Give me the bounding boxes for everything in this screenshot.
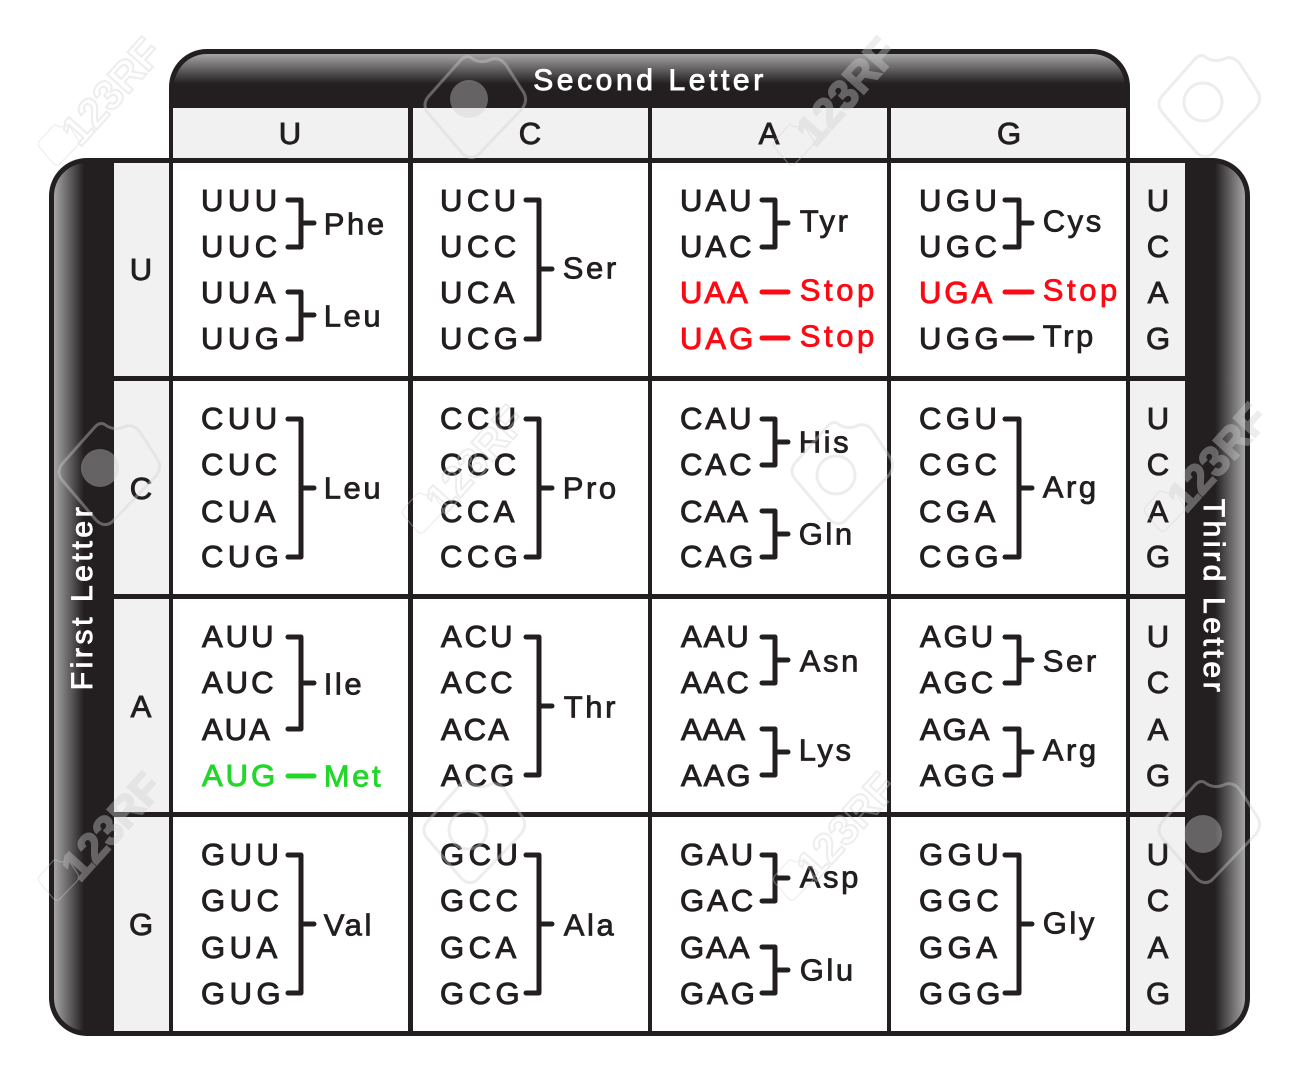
cell: CA: CAG	[680, 539, 756, 574]
cell: GG: GGU	[919, 837, 1003, 872]
cell: GG	[919, 837, 1097, 1011]
first letter row headers: A	[131, 689, 152, 724]
cell: UC: UCU	[440, 183, 521, 218]
cell: CG: Arg	[1043, 470, 1099, 504]
cell: GG: Gly	[1043, 906, 1097, 940]
cell: UU: Leu	[324, 298, 383, 334]
cell: UA: UAC	[680, 229, 754, 264]
cell: GC: Ala	[564, 908, 616, 942]
cell: AU: AUC	[202, 665, 276, 700]
cell: CG: CGG	[919, 539, 1003, 574]
cell: CA: His	[799, 424, 851, 460]
watermark: emblem middle	[792, 422, 893, 524]
third letter column: U	[1147, 183, 1169, 218]
cell: AU: Met	[324, 758, 383, 794]
cell: UU: UUC	[201, 229, 282, 264]
third letter column: G	[1146, 539, 1170, 574]
cell: GG: GGG	[919, 976, 1005, 1011]
cell: AA: AAA	[681, 712, 746, 747]
cell: AA: AAU	[681, 619, 751, 654]
cell: UU: UUU	[201, 183, 282, 218]
cell: UC: Ser	[563, 250, 619, 286]
cell: CA: CAU	[680, 401, 754, 436]
third letter column	[1146, 183, 1170, 1011]
first letter row headers	[129, 252, 153, 942]
watermark: right middle logotype: 123RF	[1158, 395, 1277, 520]
cell: UG: UGC	[919, 229, 1001, 264]
cell: AU: AUU	[202, 619, 276, 654]
third letter column: G	[1146, 321, 1170, 356]
third letter column: A	[1148, 712, 1169, 747]
cell: GG: GGA	[919, 930, 1001, 965]
cell: CU	[201, 401, 383, 574]
cell: CC: CCC	[440, 447, 521, 482]
watermark: emblem left band	[59, 424, 160, 525]
cell: AU: AUA	[202, 712, 272, 747]
cell: CA: CAC	[680, 447, 754, 482]
cell: CC	[440, 401, 619, 574]
cell: UG: Cys	[1043, 204, 1104, 238]
third letter column: A	[1148, 494, 1169, 529]
cell: CG: CGA	[919, 494, 1000, 529]
third letter column: C	[1147, 447, 1169, 482]
cell: GA: GAG	[680, 976, 758, 1011]
cell: UA: Stop	[800, 272, 878, 308]
cell: GC: GCU	[440, 837, 522, 872]
cell: AU	[202, 619, 383, 794]
cell: AG: AGA	[920, 712, 991, 747]
third letter band label: Third Letter	[1197, 499, 1230, 695]
cell: UG: UGG	[919, 321, 1003, 356]
cell: CA	[680, 401, 855, 574]
watermark: top left logotype: 123RF	[52, 29, 171, 154]
cell: CU: CUU	[201, 401, 282, 436]
cell: UU: Phe	[324, 206, 387, 242]
cell: UC: UCA	[440, 275, 519, 310]
cell: CA: Gln	[799, 516, 855, 552]
second letter column headers: A	[759, 116, 780, 151]
cell: GU: GUU	[201, 837, 283, 872]
first letter row headers: C	[130, 471, 152, 506]
cell: AC	[441, 619, 618, 793]
cell: UA	[680, 183, 878, 356]
cell: CA: CAA	[680, 494, 750, 529]
cell: AA: AAG	[681, 758, 752, 793]
cell: AC: ACC	[441, 665, 515, 700]
cell: AG: Ser	[1043, 644, 1099, 678]
watermark: bottom left logotype: 123RF	[52, 764, 171, 889]
third letter column: G	[1146, 758, 1170, 793]
cell: UG: UGA	[919, 275, 995, 310]
cell: UU	[201, 183, 387, 356]
third letter column: U	[1147, 619, 1169, 654]
cell: AG: AGC	[920, 665, 996, 700]
cell: UG: UGU	[919, 183, 1001, 218]
cell: AA	[681, 619, 861, 793]
cell: GA	[680, 837, 861, 1011]
header band: Second Letter: Second Letter	[533, 64, 767, 97]
second letter column headers: C	[519, 116, 541, 151]
cell: GC: GCC	[440, 883, 522, 918]
second letter column headers: U	[279, 116, 301, 151]
cell: UU: UUG	[201, 321, 283, 356]
cell: UU: UUA	[201, 275, 280, 310]
cell: CU: Leu	[324, 470, 383, 506]
third letter column: C	[1147, 665, 1169, 700]
cell: AU: Ile	[324, 666, 364, 702]
cell: UA: Tyr	[800, 204, 851, 238]
cell: CC: CCA	[440, 494, 519, 529]
third letter column: A	[1148, 930, 1169, 965]
cell: UC: UCG	[440, 321, 522, 356]
cell: UC: UCC	[440, 229, 521, 264]
cell: UG	[919, 183, 1121, 356]
watermark: emblem top right	[1159, 56, 1260, 157]
cell: AG: Arg	[1043, 732, 1099, 768]
cell: UA: UAU	[680, 183, 754, 218]
cell: AC: ACU	[441, 619, 515, 654]
cell: GU: Val	[324, 908, 374, 942]
cell: GU	[201, 837, 374, 1011]
cell: CU: CUG	[201, 539, 283, 574]
cell: AC: ACA	[441, 712, 511, 747]
third letter column: C	[1147, 883, 1169, 918]
cell: AU: AUG	[202, 758, 278, 793]
cell: CG: CGC	[919, 447, 1001, 482]
cell: CC: Pro	[563, 470, 619, 506]
cell: UA: UAA	[680, 275, 750, 310]
cell: UA: Stop	[800, 318, 878, 354]
cell: GC: GCA	[440, 930, 521, 965]
cell: UG: Stop	[1043, 272, 1121, 308]
cell: AA: Lys	[799, 732, 854, 768]
watermark: emblem top centre	[425, 56, 526, 158]
watermark: emblem lower centre	[424, 782, 525, 883]
third letter column: A	[1148, 275, 1169, 310]
first letter band label: First Letter	[66, 504, 99, 690]
cell: CC: CCU	[440, 401, 521, 436]
cell: AG: AGG	[920, 758, 998, 793]
cell: AG: AGU	[920, 619, 996, 654]
header band: Second Letter	[169, 49, 1130, 110]
body frame with first and third letter side bands	[49, 158, 1250, 1036]
cell: CC: CCG	[440, 539, 522, 574]
third letter column: U	[1147, 401, 1169, 436]
first letter row headers: G	[129, 907, 153, 942]
cell: AC: ACG	[441, 758, 517, 793]
third letter column: U	[1147, 837, 1169, 872]
cell: CG: CGU	[919, 401, 1001, 436]
cell: AG	[920, 619, 1099, 793]
cell: GA: GAC	[680, 883, 756, 918]
cell: AA: AAC	[681, 665, 751, 700]
cell: CG	[919, 401, 1099, 574]
cell: GU: GUA	[201, 930, 282, 965]
cell: GU: GUG	[201, 976, 285, 1011]
cell: UC	[440, 183, 619, 356]
cell: GU: GUC	[201, 883, 283, 918]
cell: AC: Thr	[564, 690, 618, 724]
third letter column: G	[1146, 976, 1170, 1011]
cell: GA: Glu	[800, 952, 856, 988]
first letter row headers: U	[130, 252, 152, 287]
watermark: bottom centre logotype: 123RF	[787, 764, 906, 889]
table grid: header row, side columns and cell backgrounds	[114, 108, 1185, 1031]
watermark: centre logotype: 123RF	[416, 397, 535, 522]
cell: GA: GAA	[680, 930, 751, 965]
cell: UG: Trp	[1043, 318, 1096, 354]
second letter column headers	[279, 116, 1021, 151]
cell: AA: Asn	[800, 644, 861, 678]
cell: UA: UAG	[680, 321, 756, 356]
cell: GG: GGC	[919, 883, 1003, 918]
third letter column: C	[1147, 229, 1169, 264]
cell: GC	[440, 837, 616, 1011]
watermark: emblem lower right	[1159, 782, 1260, 883]
cell: CU: CUA	[201, 494, 280, 529]
cell: CU: CUC	[201, 447, 282, 482]
second letter column headers: G	[997, 116, 1021, 151]
watermark: top centre logotype: 123RF	[787, 29, 906, 154]
cell: GC: GCG	[440, 976, 524, 1011]
cell: GA: GAU	[680, 837, 756, 872]
cell: GA: Asp	[800, 860, 861, 894]
